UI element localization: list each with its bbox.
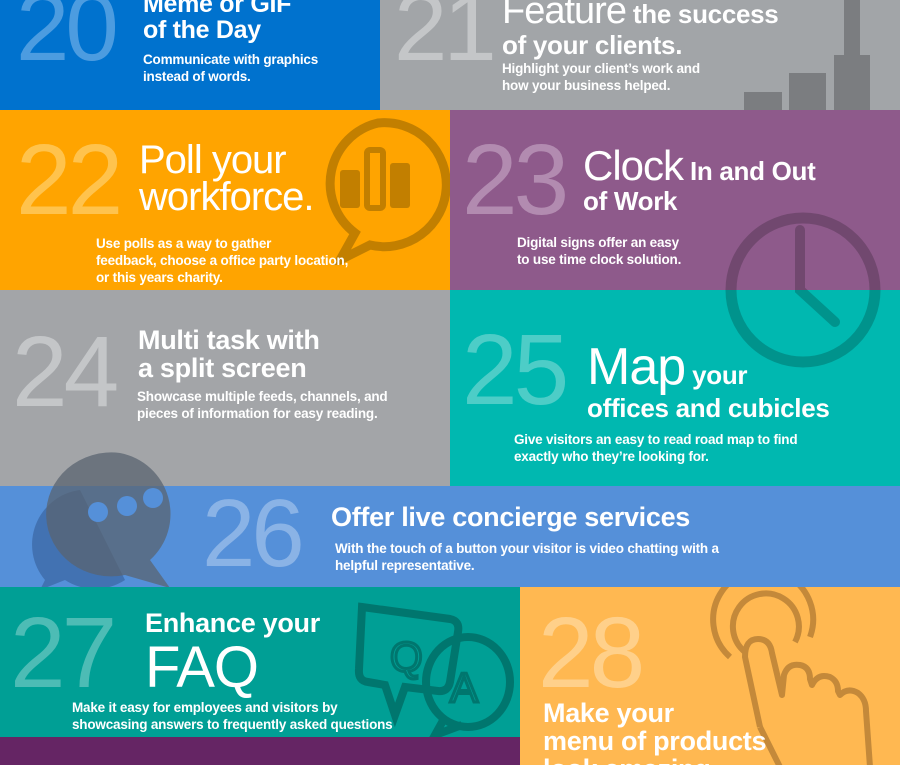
panel 27: faq: [0, 587, 520, 737]
heading 21: [502, 0, 778, 60]
panel 29: purple strip: [0, 737, 520, 765]
body 22: or this years charity.: [96, 270, 223, 285]
body 25: [514, 432, 797, 464]
number 28: 28: [538, 597, 641, 709]
body 22: [96, 236, 348, 285]
body 20: instead of words.: [143, 69, 251, 84]
icon: hand touch: [710, 587, 873, 765]
panel 28: menu: [520, 587, 900, 765]
body 23: to use time clock solution.: [517, 252, 681, 267]
icon: Q and A bubbles: Q: [390, 633, 423, 680]
body 23: [517, 235, 681, 267]
number 25: 25: [462, 314, 565, 426]
body 27: Make it easy for employees and visitors by: [72, 700, 337, 715]
panel 23: clock: [450, 110, 900, 290]
icon: Q and A bubbles: [355, 602, 514, 737]
heading 25: Map your: [587, 338, 747, 396]
panel 22: poll: [0, 110, 450, 290]
icon: chat bubbles: [32, 452, 170, 587]
heading 28: Make your: [543, 698, 674, 728]
heading 23: Clock In and Out: [583, 142, 816, 189]
heading 21: of your clients.: [502, 30, 682, 60]
heading 24: Multi task with: [138, 325, 320, 355]
panel 26: concierge: [0, 486, 900, 587]
number 22: 22: [16, 124, 119, 236]
panel 20: meme or gif: [0, 0, 380, 110]
body 22: feedback, choose a office party location,: [96, 253, 348, 268]
heading 20: [143, 0, 291, 44]
heading 22: workforce.: [139, 175, 314, 219]
body 27: [72, 700, 392, 732]
body 22: Use polls as a way to gather: [96, 236, 271, 251]
body 26: helpful representative.: [335, 558, 474, 573]
body 24: [137, 389, 387, 421]
body 24: pieces of information for easy reading.: [137, 406, 378, 421]
heading 24: [138, 325, 320, 383]
heading 24: a split screen: [138, 353, 306, 383]
body 26: With the touch of a button your visitor is video chatting with a: [335, 541, 719, 556]
number 24: 24: [12, 316, 115, 428]
heading 28: menu of products: [543, 726, 766, 756]
body 20: Communicate with graphics: [143, 52, 318, 67]
body 27: showcasing answers to frequently asked questions: [72, 717, 392, 732]
heading 22: [138, 138, 314, 219]
body 21: Highlight your client’s work and: [502, 61, 700, 76]
body 23: Digital signs offer an easy: [517, 235, 679, 250]
heading 20: of the Day: [143, 16, 261, 44]
body 20: [143, 52, 318, 84]
body 24: Showcase multiple feeds, channels, and: [137, 389, 387, 404]
icon: Q and A bubbles: A: [450, 664, 478, 711]
panel 21: feature clients: [380, 0, 900, 110]
body 25: Give visitors an easy to read road map to find: [514, 432, 797, 447]
panel 25: map: [450, 290, 900, 486]
body 21: how your business helped.: [502, 78, 670, 93]
panel 24: split screen: [0, 290, 450, 486]
heading 28: [543, 698, 766, 765]
icon: poll speech bubble: [326, 118, 450, 265]
heading 22: Poll your: [139, 138, 286, 182]
heading 23: of Work: [583, 186, 677, 216]
heading 23: [583, 142, 816, 216]
icon: buildings: [744, 0, 870, 110]
heading 25: offices and cubicles: [587, 393, 830, 423]
FAQ word: FAQ: [145, 635, 258, 700]
number 27: 27: [10, 597, 113, 709]
number 23: 23: [462, 124, 565, 236]
body 26: [335, 541, 720, 573]
body 25: exactly who they’re looking for.: [514, 449, 709, 464]
heading 26: Offer live concierge services: [331, 502, 690, 532]
icon: clock: [726, 212, 880, 368]
heading 25: [587, 338, 830, 423]
heading 27: Enhance your: [145, 608, 320, 638]
body 21: [502, 61, 700, 93]
